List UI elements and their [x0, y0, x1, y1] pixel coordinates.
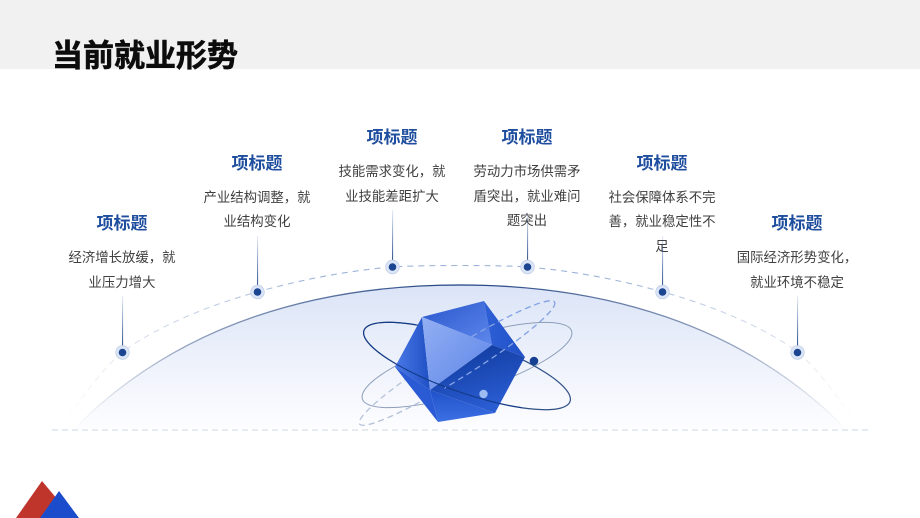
icosahedron	[395, 301, 525, 422]
item 2: 产业结构调整，就	[203, 190, 311, 205]
item 3: 项标题	[366, 128, 418, 147]
item 3	[338, 128, 446, 274]
dashed outer arc	[62, 266, 858, 425]
item 4: 题突出	[507, 213, 547, 228]
item 4: 项标题	[502, 128, 552, 147]
item 3: 技能需求变化，就	[338, 164, 446, 179]
item 6: 项标题	[772, 214, 822, 233]
item 3: 业技能差距扩大	[345, 189, 439, 204]
orbit dot dark	[530, 357, 538, 365]
item 5: 项标题	[636, 154, 688, 173]
item 2: 业结构变化	[224, 214, 290, 229]
item 6: 就业环境不稳定	[750, 275, 844, 290]
header band	[0, 0, 920, 69]
item 4: 劳动力市场供需矛	[473, 163, 581, 179]
dome outline	[75, 285, 845, 428]
item 1: 经济增长放缓，就	[68, 250, 176, 265]
orbit front segments	[363, 300, 556, 408]
item 2	[203, 154, 311, 299]
item 5	[608, 154, 716, 299]
item 2: 项标题	[232, 154, 282, 173]
orbit back rings	[352, 289, 580, 437]
dome	[75, 285, 845, 428]
central gem with orbits	[358, 300, 572, 426]
item 5: 足	[655, 239, 669, 254]
item 5: 社会保障体系不完	[608, 190, 716, 205]
dashed baseline	[52, 429, 868, 431]
orbit dot light	[479, 390, 488, 398]
item 6: 国际经济形势变化，	[737, 250, 857, 265]
item 5: 善，就业稳定性不	[608, 214, 716, 229]
item 1	[68, 214, 176, 359]
item 1: 业压力增大	[89, 275, 155, 290]
item 6	[737, 214, 857, 359]
item 4: 盾突出，就业难问	[473, 189, 581, 204]
title: 当前就业形势	[52, 38, 238, 74]
item 1: 项标题	[96, 214, 148, 233]
item 4	[473, 128, 581, 274]
logo: triangles	[16, 481, 79, 518]
